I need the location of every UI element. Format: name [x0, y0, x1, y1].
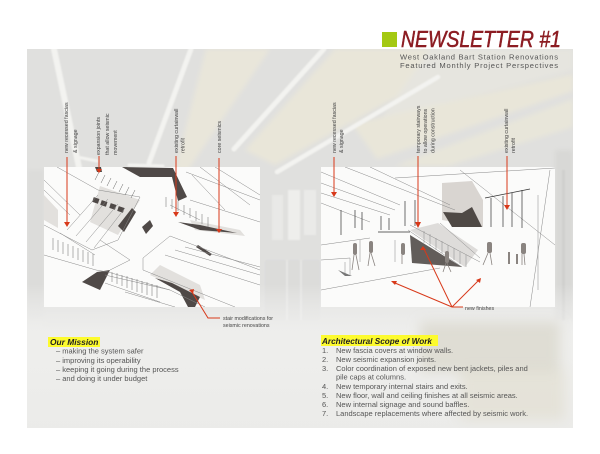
callout labels: right panel: retrofit: [511, 137, 517, 153]
text block: architectural scope of work: New fascia covers at window walls.: [336, 346, 453, 355]
ceiling and rail linework: [321, 167, 555, 307]
callout labels: right panel: during construction: [430, 108, 436, 153]
callout labels: left panel: that allow seismic: [105, 113, 111, 155]
stair balusters: [424, 231, 466, 267]
panel: isometric station drawing: [44, 167, 260, 307]
text block: architectural scope of work: 6.: [322, 400, 328, 409]
callout labels: left panel: seismic renovations: [223, 323, 270, 329]
text block: architectural scope of work: New internal signage and sound baffles.: [336, 400, 469, 409]
text block: our mission: – making the system safer: [56, 346, 144, 356]
text block: architectural scope of work: New temporary internal stairs and exits.: [336, 382, 468, 391]
text block: architectural scope of work: Landscape replacements where affected by seismic work.: [336, 409, 528, 418]
text block: architectural scope of work: 4.: [322, 382, 328, 391]
callout labels: right panel: [332, 102, 517, 312]
dark wedge upper: [443, 207, 482, 227]
text block: our mission: – and doing it under budget: [56, 374, 148, 383]
railing ticks: [53, 172, 208, 298]
callout labels: right panel: new recessed fascias: [332, 102, 338, 153]
text block: architectural scope of work: New seismic expansion joints.: [336, 355, 436, 364]
text block: our mission: [48, 337, 179, 383]
callout labels: right panel: existing curtainwall: [504, 109, 510, 153]
callout labels: left panel: expansion joints: [96, 117, 102, 155]
callout labels: left panel: [64, 102, 273, 329]
arrows: right panel callouts: [334, 156, 507, 307]
callout labels: right panel: to allow operations: [423, 108, 429, 153]
callout labels: left panel: movement: [113, 130, 119, 155]
text block: our mission: Our Mission: [50, 337, 98, 347]
subtitle: featured perspectives: Featured Monthly Project Perspectives: [400, 61, 558, 70]
text block: our mission: – keeping it going during the process: [56, 365, 179, 374]
text block: architectural scope of work: [321, 335, 528, 418]
callout labels: left panel: & signage: [73, 129, 79, 153]
callout labels: right panel: & signage: [339, 129, 345, 153]
callout labels: left panel: core seismics: [217, 121, 223, 153]
text block: architectural scope of work: Color coordination of exposed new bent jackets, piles and: [336, 364, 528, 373]
callout labels: left panel: retrofit: [180, 137, 186, 153]
figures: [353, 241, 526, 264]
text block: architectural scope of work: Architectural Scope of Work: [321, 337, 432, 346]
callout labels: left panel: new recessed fascias: [64, 102, 70, 153]
light-grey tone fills: [44, 186, 245, 300]
dark structural masses: [82, 167, 237, 307]
text block: our mission: – improving its operability: [56, 356, 141, 365]
under-stair shadow: [410, 235, 462, 267]
heading: newsletter number: NEWSLETTER #1: [401, 26, 561, 52]
background photo: station interior: [27, 49, 573, 428]
panel: station interior perspective: [321, 167, 555, 307]
linework: [44, 167, 260, 307]
title: newsletter header: [382, 26, 561, 70]
icon: green square: [382, 32, 397, 47]
callout labels: right panel: temporary stairways: [416, 105, 422, 153]
text block: architectural scope of work: 5.: [322, 391, 328, 400]
stair tone: [410, 223, 478, 267]
text block: architectural scope of work: 1.: [322, 346, 328, 355]
callout labels: right panel: new finishes: [465, 306, 494, 312]
callout labels: left panel: existing curtainwall: [174, 109, 180, 153]
text block: architectural scope of work: New floor, wall and ceiling finishes at all seismic areas.: [336, 391, 518, 400]
text block: architectural scope of work: 3.: [322, 364, 328, 373]
subtitle: project name: West Oakland Bart Station Renovations: [400, 52, 558, 62]
callout labels: left panel: stair modifications for: [223, 316, 273, 322]
text block: architectural scope of work: 7.: [322, 409, 328, 418]
text block: architectural scope of work: pile caps at columns.: [336, 372, 406, 382]
wall tone: [442, 181, 483, 227]
text block: architectural scope of work: 2.: [322, 355, 328, 364]
arrows: left panel callouts: [67, 156, 220, 318]
